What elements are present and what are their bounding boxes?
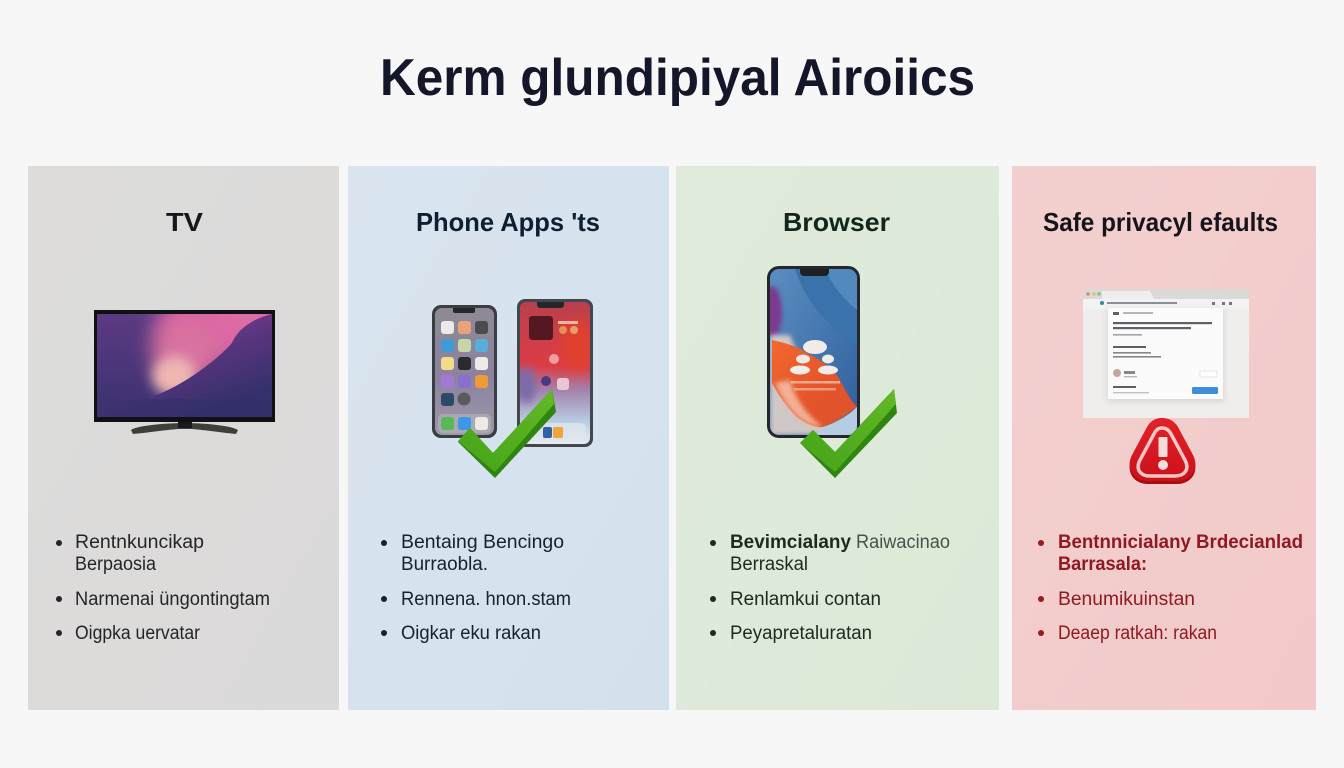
icon: warning triangle [1130,418,1195,484]
bullet list: Browser: Renlamkui contan [730,589,881,610]
bullet list: Phone Apps: Burraobla. [401,554,488,575]
bullet list: Phone Apps: Bentaing Bencingo [401,532,564,553]
bullet list: Safe privacy defaults [1038,532,1303,644]
icon: two phones with check [432,299,596,478]
bullet list: Safe privacy defaults: Barrasala: [1058,554,1147,575]
bullet list: Browser: Berraskal [730,554,808,575]
bullet list: Safe privacy defaults: Deaep ratkah: rakan [1058,623,1217,644]
heading: Browser: Browser [783,207,890,237]
bullet list: Browser: Raiwacinao [856,532,950,553]
heading: Safe privacy defaults: Safe privacyl efaults [1043,207,1278,237]
heading: TV: TV [166,207,204,237]
phone left [432,305,497,438]
bullet list: TV: Berpaosia [75,554,156,575]
bullet list: Browser [710,532,950,644]
icon: television [94,310,275,434]
bullet list: Phone Apps: Rennena. hnon.stam [401,589,571,610]
bullet list: TV: Narmenai üngontingtam [75,589,270,610]
phone right [516,299,596,447]
bullet list: Phone Apps [381,532,571,644]
panel: Safe privacy defaults [1012,166,1316,710]
icon: phone with check [762,266,897,478]
panel: Browser [676,166,999,710]
bullet list: Safe privacy defaults: Bentnnicialany Brdecianlad [1058,532,1303,553]
bullet list: TV: Rentnkuncikap [75,532,204,553]
bullet list: Browser: Peyapretaluratan [730,623,872,644]
chat bubbles graphic [790,340,840,390]
check mark [458,389,556,478]
bullet list: Browser: Bevimcialany [730,532,851,553]
bullet list: Safe privacy defaults: Benumikuinstan [1058,589,1195,610]
bullet list: TV [56,532,270,644]
bullet list: Phone Apps: Oigkar eku rakan [401,623,541,644]
panel: Phone Apps [348,166,669,710]
title: Kerm glundipiyal Airoiics [380,49,975,107]
heading: Phone Apps: Phone Apps 'ts [416,207,600,237]
panel: TV [28,166,339,710]
check mark [800,389,897,478]
icon: browser window with dialog [1083,289,1249,418]
bullet list: TV: Oigpka uervatar [75,623,201,644]
